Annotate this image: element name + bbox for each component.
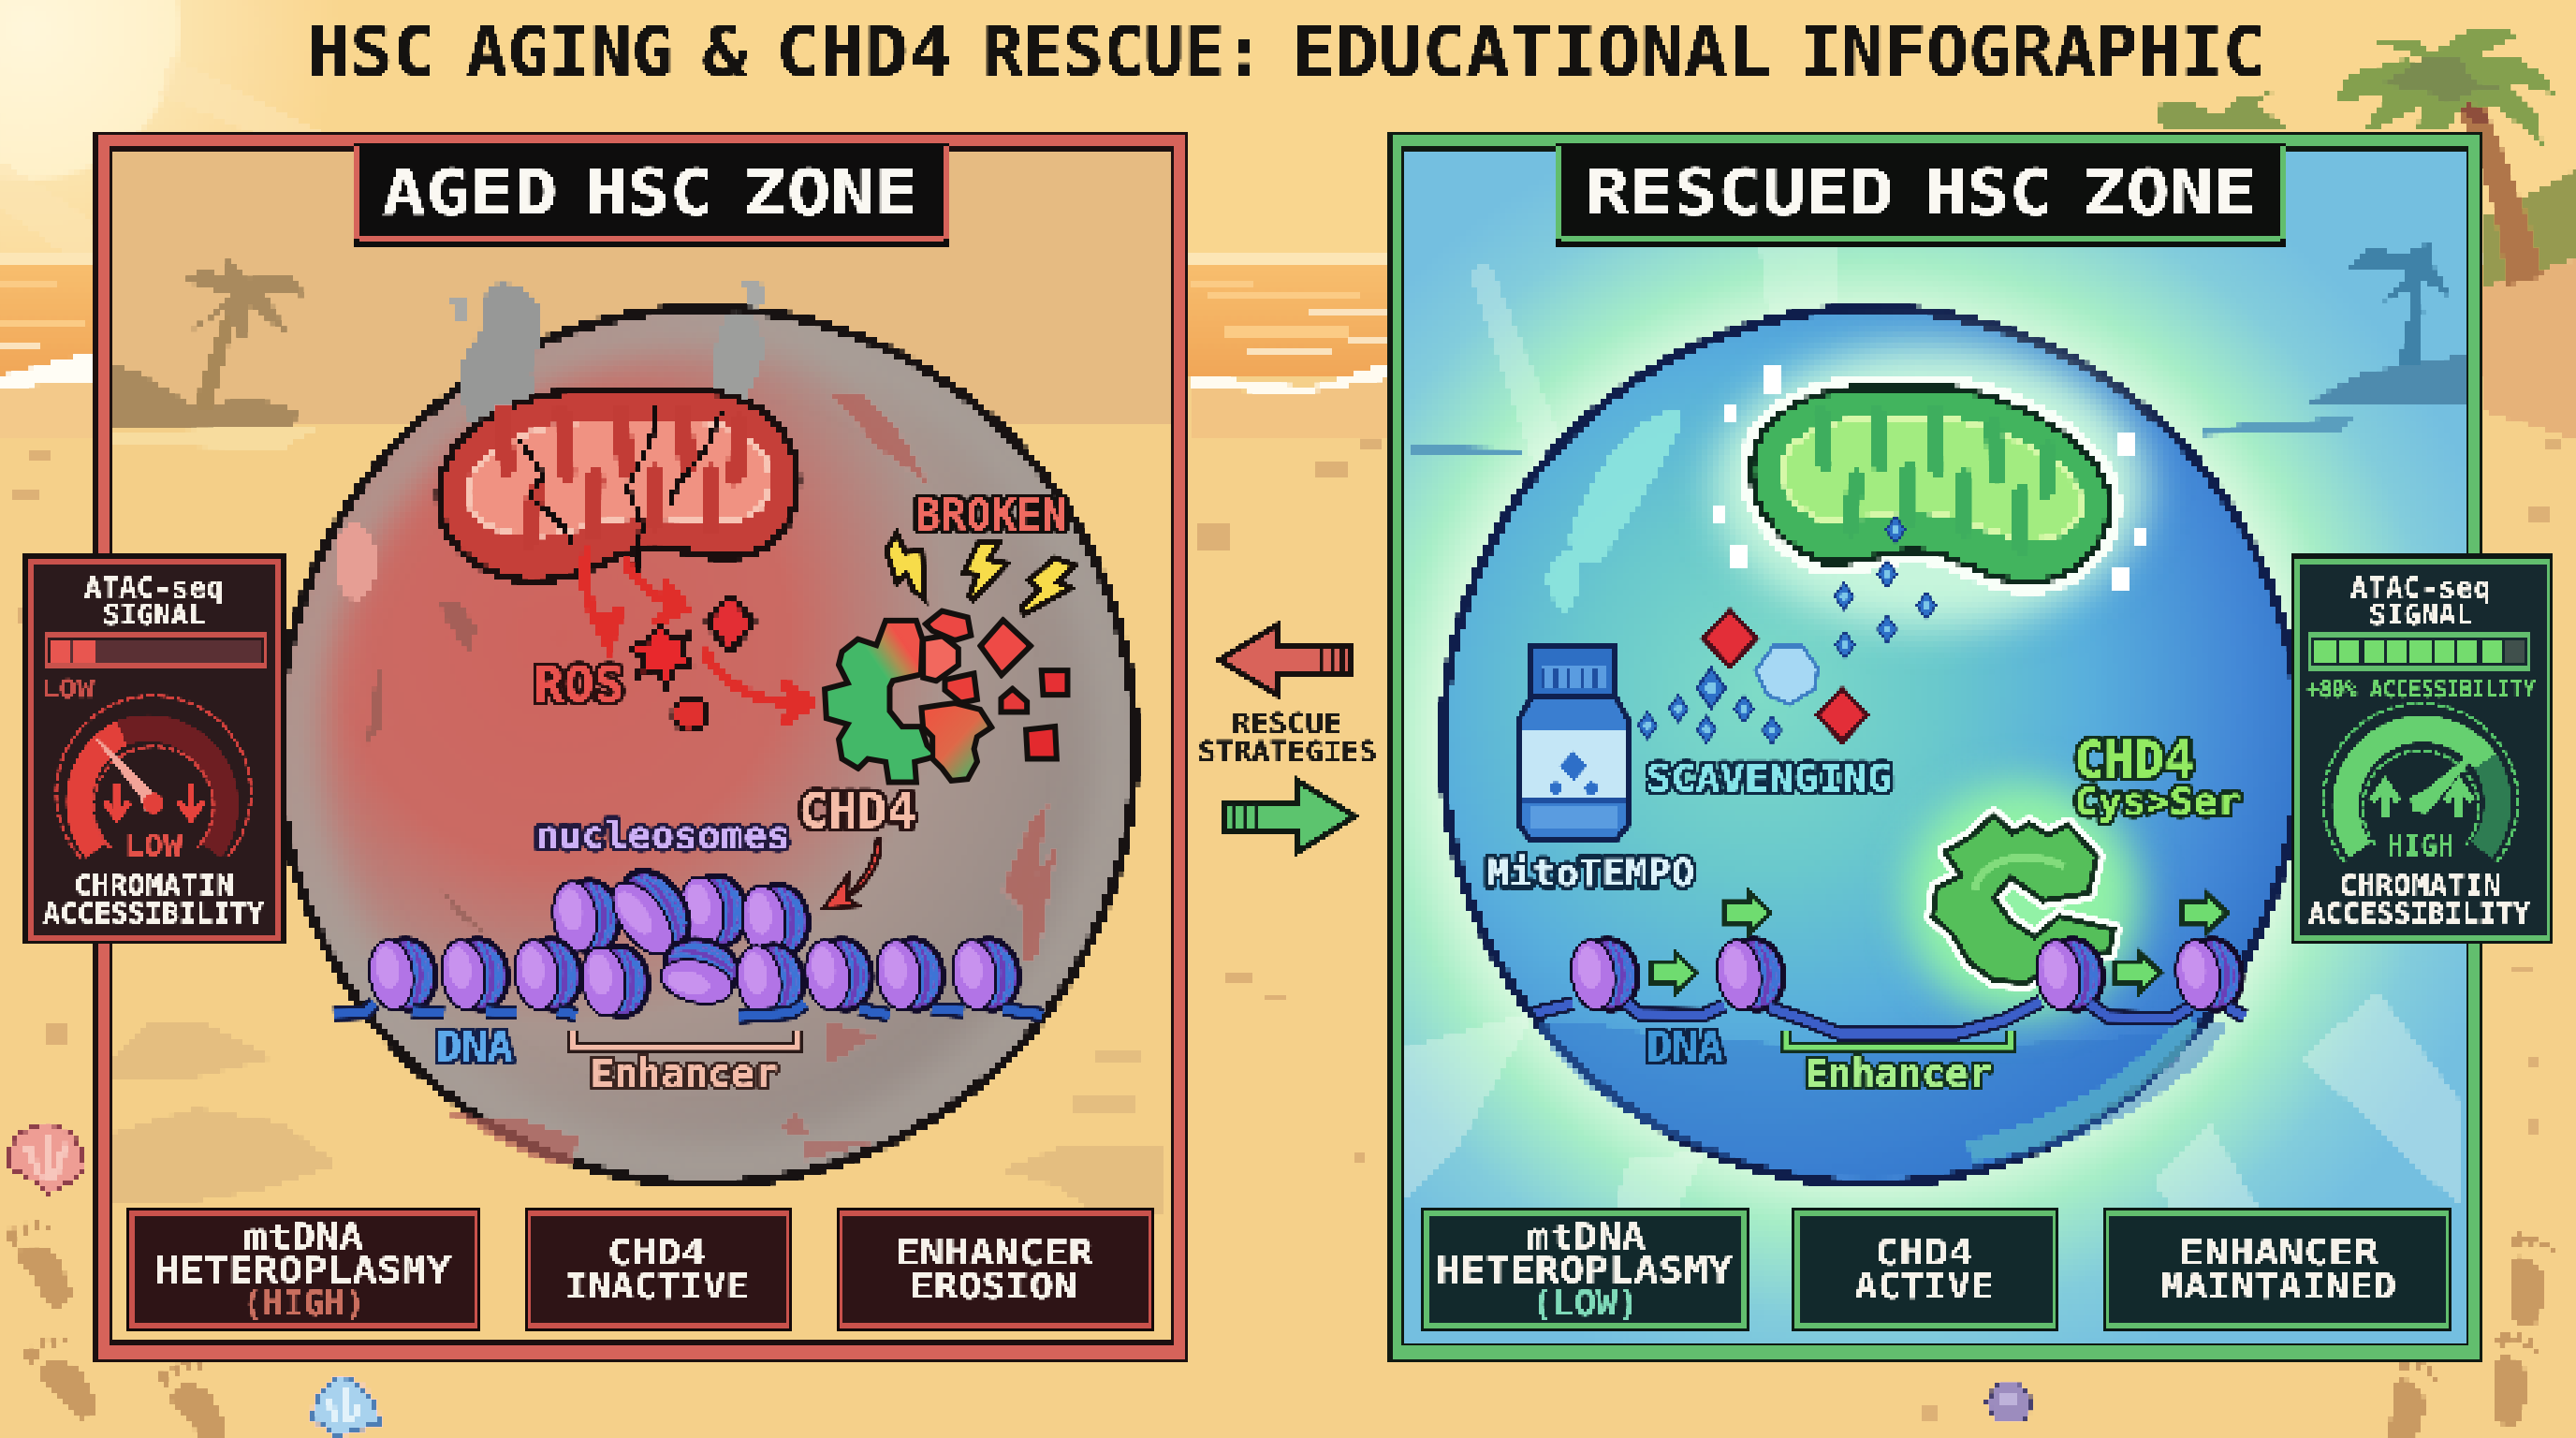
panel frame and sandy interior	[94, 131, 1189, 1363]
title tab: aged HSC zone: AGED	[382, 156, 558, 230]
label: BROKEN: BROKEN	[915, 490, 1067, 540]
title tab: rescued HSC zone: HSC	[1925, 156, 2052, 230]
label: DNA: DNA	[436, 1023, 513, 1071]
pebble: purple	[1986, 1382, 2033, 1421]
CHD4 gear: fragmented	[826, 611, 1067, 782]
status box: mtDNA heteroplasmy low: HETEROPLASMY	[1436, 1250, 1733, 1291]
status box: CHD4 inactive	[524, 1209, 793, 1331]
title: AGING	[466, 12, 673, 93]
label: CHD4: CHD4	[798, 784, 916, 840]
signal bar: eight of nine segments	[2308, 633, 2529, 670]
status box: CHD4 active: CHD4	[1875, 1232, 1973, 1273]
title: EDUCATIONAL	[1292, 12, 1771, 93]
icon: MitoTEMPO bottle	[1518, 645, 1629, 841]
status box: enhancer maintained: MAINTAINED	[2160, 1266, 2396, 1307]
status box: enhancer erosion: EROSION	[910, 1266, 1077, 1307]
panel text: CHROMATIN	[2339, 870, 2501, 902]
label: CHD4 Cys>Ser: Cys>Ser	[2074, 781, 2241, 824]
panel: aged HSC zone	[23, 131, 1189, 1363]
status box: enhancer erosion: ENHANCER	[895, 1232, 1093, 1273]
title tab: aged HSC zone	[353, 144, 948, 247]
arrow: green pointing right	[1224, 781, 1354, 852]
status box: mtDNA heteroplasmy low: mtDNA	[1526, 1216, 1646, 1257]
mitochondrion: healthy with glow	[1711, 346, 2145, 627]
panel text: CHROMATIN	[74, 870, 234, 902]
lightning bolts	[886, 534, 1075, 614]
ATAC-seq panel: high signal	[2291, 554, 2554, 944]
enhancer bracket	[1787, 1032, 2011, 1049]
aged cell	[279, 281, 1134, 1183]
panel text: ACCESSIBILITY	[43, 898, 264, 931]
status box: enhancer erosion	[836, 1209, 1154, 1331]
gauge dial	[56, 696, 251, 858]
label: CHD4 Cys>Ser	[2074, 730, 2241, 824]
gauge panel frame	[2291, 554, 2554, 944]
mitochondrion: damaged with smoke	[440, 281, 797, 580]
panel text: LOW	[124, 829, 183, 863]
label: rescue strategies	[1198, 708, 1377, 769]
title: INFOGRAPHIC	[1799, 12, 2265, 93]
interior glow, light rays and island	[1406, 152, 2465, 1341]
rescued cell	[1443, 309, 2299, 1183]
status box: CHD4 inactive: INACTIVE	[565, 1266, 749, 1307]
gauge dial	[2323, 704, 2518, 863]
seashell: pink	[8, 1123, 84, 1195]
panel text: +80% ACCESSIBILITY	[2306, 676, 2536, 704]
label: ROS: ROS	[534, 657, 624, 713]
title: HSC	[308, 12, 435, 93]
status box: mtDNA heteroplasmy low: (LOW)	[1531, 1283, 1639, 1324]
title tab: aged HSC zone: ZONE	[743, 156, 918, 230]
label: Enhancer: Enhancer	[591, 1050, 778, 1096]
label: DNA: DNA	[1647, 1023, 1723, 1071]
label: Enhancer: Enhancer	[1805, 1050, 1992, 1096]
status box: CHD4 inactive: CHD4	[607, 1232, 706, 1273]
accessibility arrows	[1651, 893, 2227, 992]
panel frame and sky interior	[1388, 131, 2483, 1363]
center: rescue strategies arrows	[1198, 624, 1377, 852]
label: rescue strategies: STRATEGIES	[1198, 736, 1377, 769]
label: CHD4 Cys>Ser: CHD4	[2074, 730, 2194, 789]
label: SCAVENGING: SCAVENGING	[1647, 757, 1892, 800]
signal bar: two of nine segments	[45, 633, 268, 668]
panel text: ATAC-seq	[2350, 572, 2491, 605]
nucleosomes: spaced open chromatin	[1567, 935, 2247, 1014]
arrow: red pointing left	[1220, 624, 1352, 696]
label: nucleosomes: nucleosomes	[535, 814, 790, 858]
status box: enhancer maintained: ENHANCER	[2179, 1232, 2378, 1273]
status box: mtDNA heteroplasmy high	[127, 1209, 481, 1331]
status box: CHD4 active	[1793, 1209, 2059, 1331]
title: &	[702, 12, 747, 93]
right hill and palm tree	[2153, 26, 2576, 440]
status box: mtDNA heteroplasmy high: HETEROPLASMY	[154, 1250, 451, 1291]
CHD4 gear: intact with glow	[1905, 782, 2139, 1016]
status box: mtDNA heteroplasmy low	[1422, 1209, 1749, 1331]
scavenging particles and ROS	[1638, 517, 1936, 743]
status box: CHD4 active: ACTIVE	[1854, 1266, 1994, 1307]
panel text: SIGNAL	[103, 599, 205, 632]
arrow: CHD4 to nucleosomes	[824, 838, 881, 908]
seashell: blue	[313, 1376, 378, 1436]
status box: mtDNA heteroplasmy high: (HIGH)	[242, 1283, 365, 1324]
panel text: HIGH	[2387, 829, 2454, 863]
panel text: LOW	[41, 673, 95, 704]
title	[308, 12, 2265, 93]
gauge panel frame	[23, 554, 285, 944]
panel text: SIGNAL	[2369, 599, 2473, 632]
interior beach scenery: palm and dunes	[111, 258, 1165, 1213]
DNA strand with open enhancer	[1535, 1002, 2245, 1034]
label: MitoTEMPO: MitoTEMPO	[1486, 852, 1694, 895]
title: CHD4	[776, 12, 953, 93]
footprints	[3, 1214, 2564, 1438]
nucleosomes: compacted	[365, 853, 1023, 1020]
sand speckles	[12, 436, 2559, 1421]
ATAC-seq panel: low signal	[23, 554, 285, 944]
sky and sun	[0, 0, 2576, 281]
cell membrane and cytoplasm	[1443, 309, 2299, 1183]
status box: enhancer maintained	[2102, 1209, 2452, 1331]
ocean strip	[0, 253, 2576, 440]
ROS particles	[631, 597, 754, 730]
title tab: rescued HSC zone: ZONE	[2083, 156, 2257, 230]
panel text	[41, 572, 264, 931]
title tab: rescued HSC zone	[1555, 144, 2286, 247]
label: rescue strategies: RESCUE	[1232, 708, 1342, 741]
panel: rescued HSC zone	[1388, 131, 2554, 1363]
DNA strand	[333, 1004, 1043, 1017]
title tab: aged HSC zone: HSC	[585, 156, 712, 230]
panel text: ACCESSIBILITY	[2308, 898, 2530, 931]
ROS diffusion arrows	[584, 552, 811, 721]
title tab: rescued HSC zone: RESCUED	[1586, 156, 1894, 230]
cell membrane and cytoplasm	[279, 309, 1134, 1183]
panel text: ATAC-seq	[84, 572, 224, 605]
status box: mtDNA heteroplasmy high: mtDNA	[243, 1216, 363, 1257]
enhancer bracket	[573, 1032, 797, 1049]
title: RESCUE:	[983, 12, 1265, 93]
panel text	[2306, 572, 2536, 931]
